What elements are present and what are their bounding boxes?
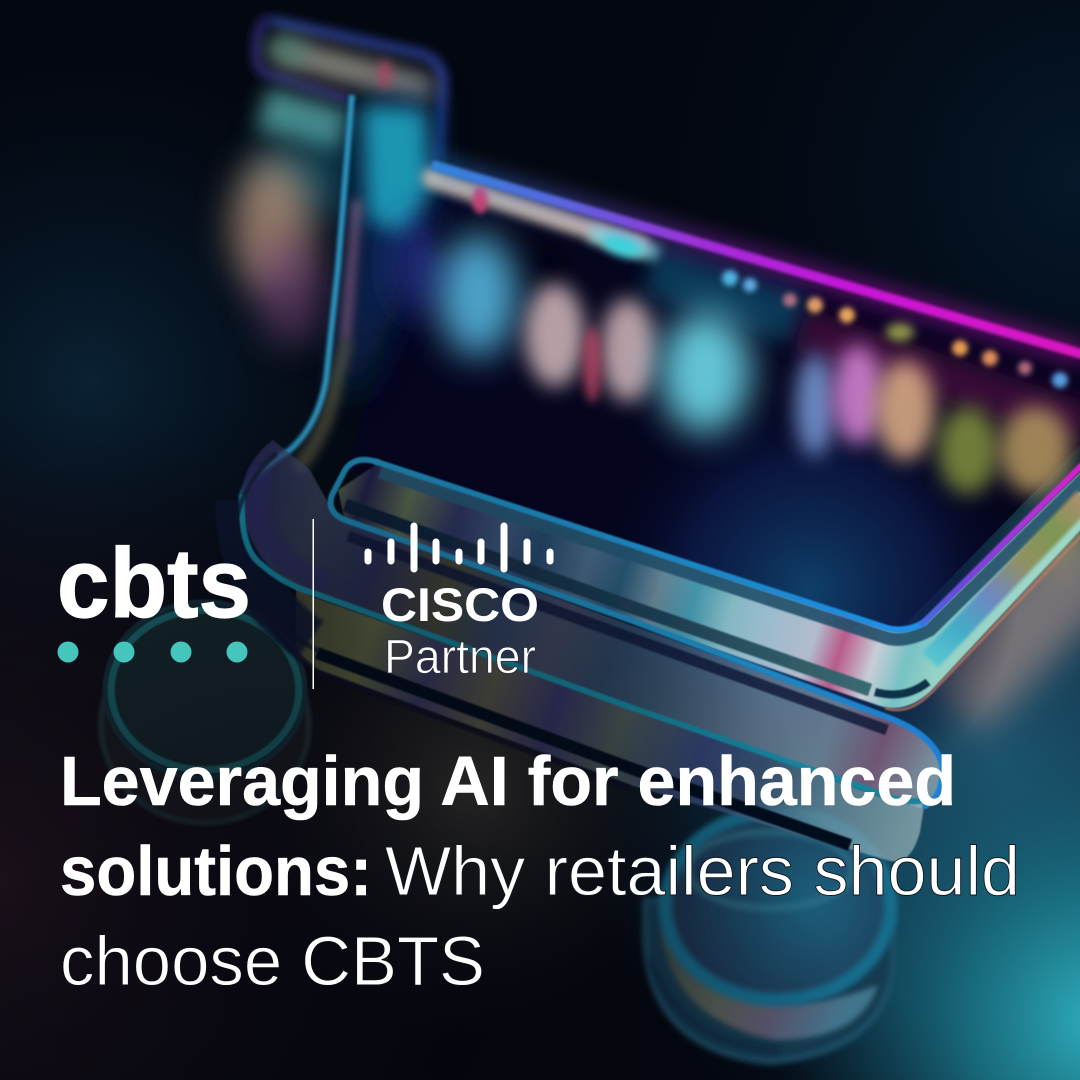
basket outlines — [236, 455, 1080, 806]
logo divider — [312, 519, 314, 689]
cbts logo — [57, 528, 251, 662]
cisco bridge bars — [368, 526, 550, 569]
cart handle — [256, 20, 443, 185]
left wheel — [101, 602, 309, 823]
cart top magenta edge — [432, 165, 1080, 355]
outer bar upper glass — [240, 440, 942, 808]
outer bar lower glass — [296, 585, 925, 861]
blurred reflections — [432, 178, 1080, 494]
headline line 2 light: Why retailers should — [385, 832, 1020, 910]
right wheel — [645, 812, 893, 1062]
cbts dots — [58, 642, 248, 662]
cisco partner logo — [368, 526, 550, 684]
basket glass bands — [238, 440, 1080, 861]
basket glass — [338, 464, 1080, 708]
cart stem — [232, 90, 446, 497]
headline line 2 bold: solutions: — [60, 832, 372, 910]
headline — [60, 742, 1020, 1000]
headline line 1: Leveraging AI for enhanced — [60, 742, 956, 820]
headline line 3: choose CBTS — [60, 922, 485, 1000]
partner label: Partner — [384, 631, 536, 684]
cbts wordmark: cbts — [57, 528, 251, 638]
cisco wordmark: CISCO — [381, 578, 539, 631]
